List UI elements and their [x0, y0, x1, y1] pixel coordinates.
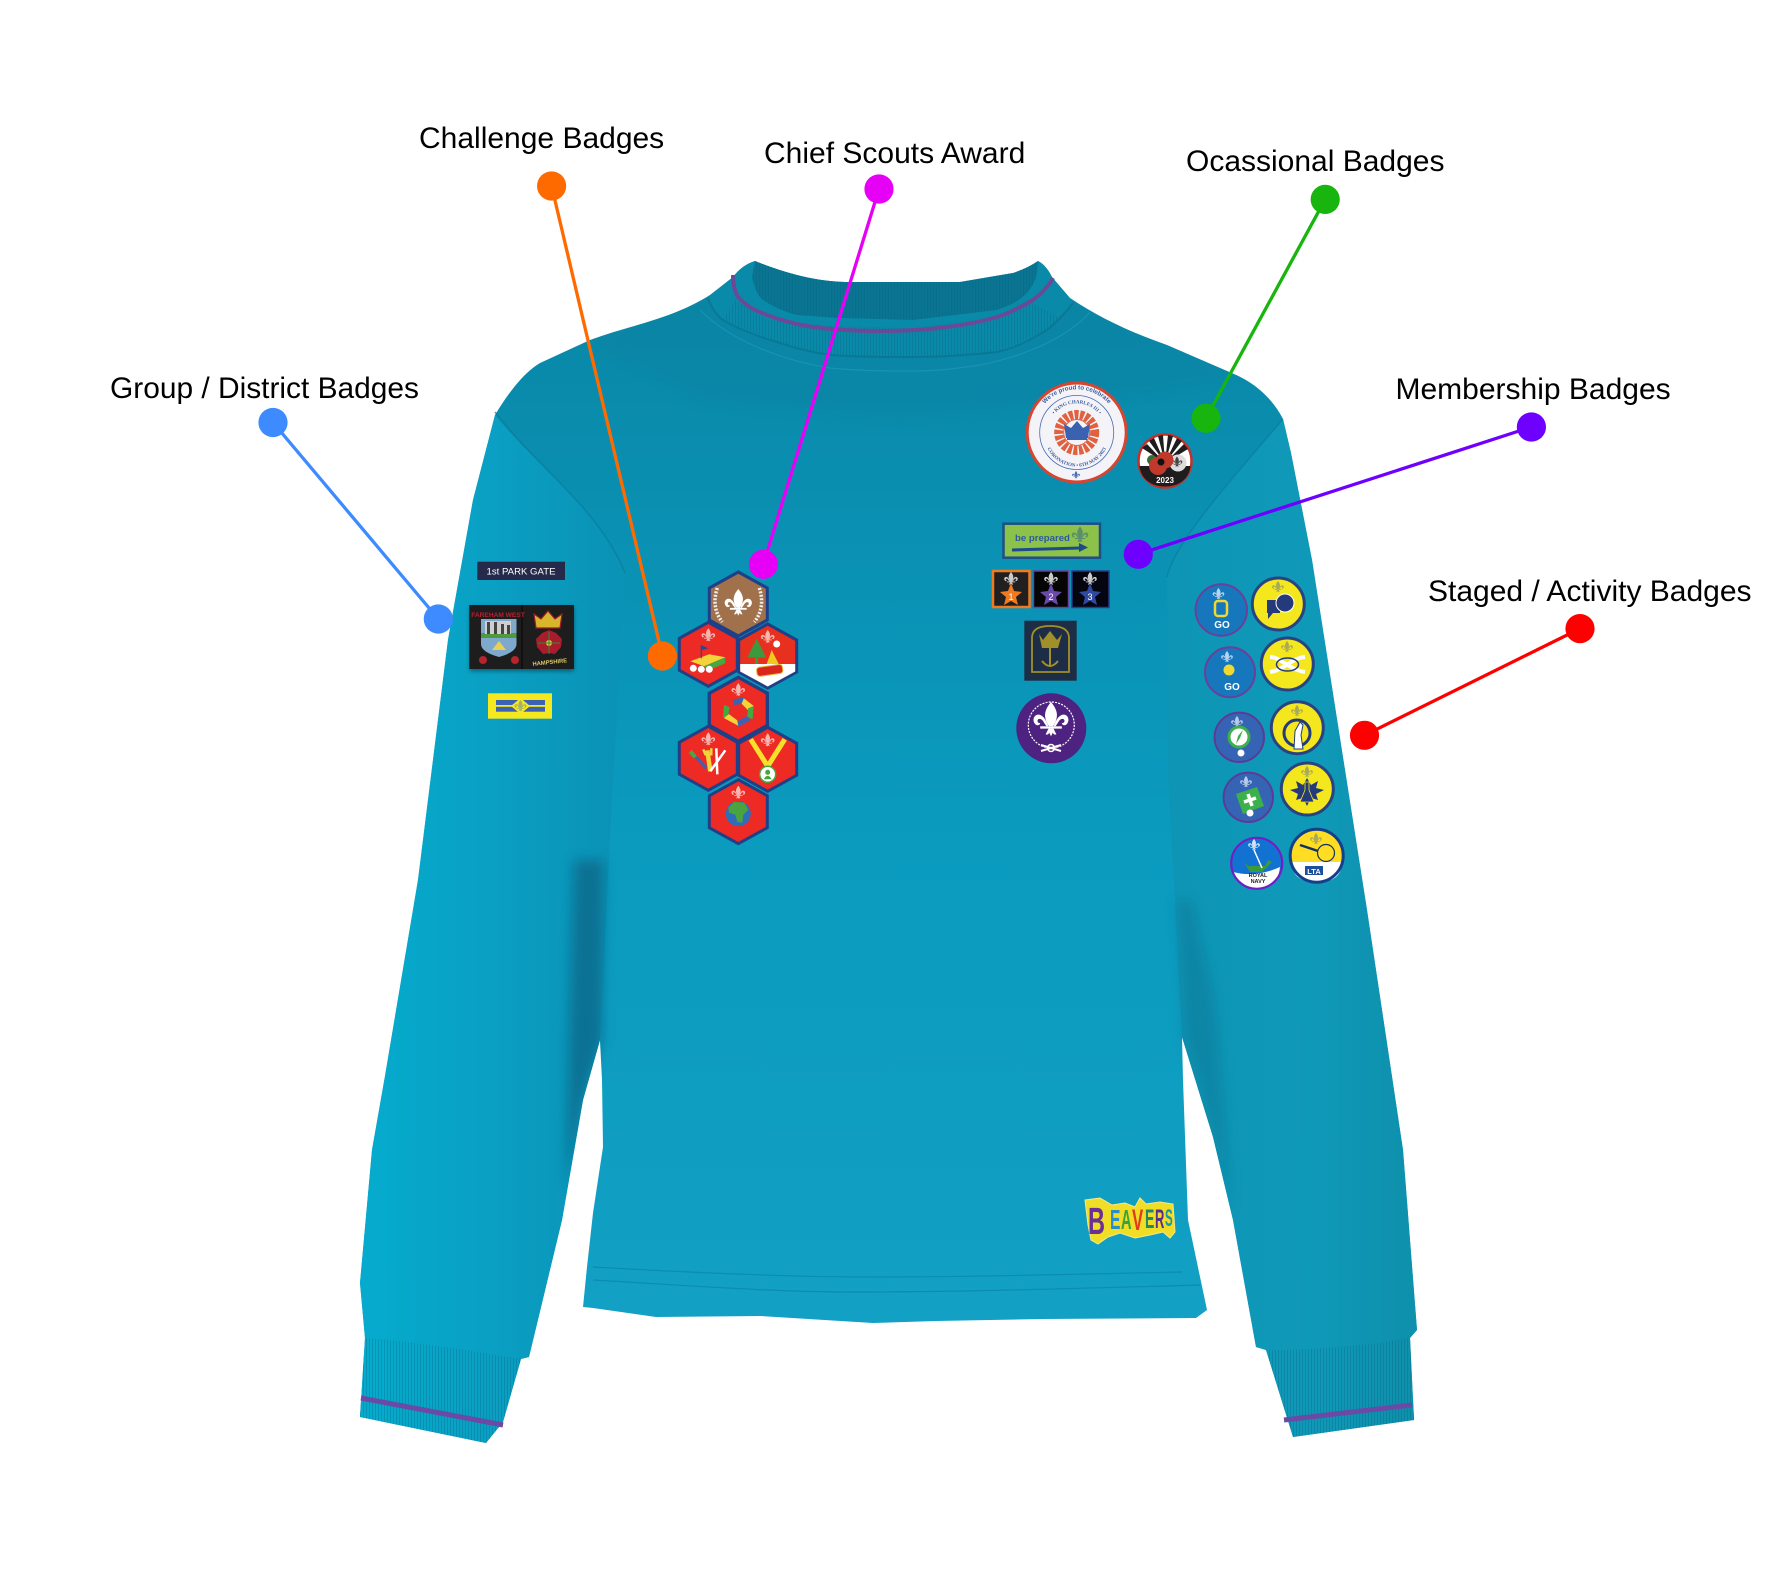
beavers logo: A: [1121, 1204, 1132, 1235]
progress star badge 2: 2: [1048, 592, 1054, 602]
collar ribbing: [723, 261, 1060, 357]
right cuff stripe: [1284, 1405, 1412, 1420]
skills challenge hexagon: [679, 726, 737, 790]
collar rib: [708, 261, 1073, 357]
collar shoulder shade: [614, 298, 1206, 362]
label: Membership Badges: Membership Badges: [1396, 373, 1671, 406]
staged and activity badges: [1196, 578, 1343, 889]
collar purple stripe: [733, 275, 1053, 331]
staged badge: navigator: [1215, 713, 1264, 762]
beavers logo: V: [1132, 1204, 1144, 1237]
pointer: challenge badges: [537, 171, 677, 671]
district and county badge: HAMPSHIRE: [532, 658, 568, 668]
pointer: membership badges: [1124, 412, 1546, 569]
adventure challenge hexagon: [739, 624, 797, 688]
chief scout award hexagon: [709, 572, 767, 636]
label: Ocassional Badges: Ocassional Badges: [1186, 145, 1444, 178]
world membership badge: [1016, 693, 1086, 763]
progress star badge 3: 3: [1087, 592, 1093, 602]
world challenge hexagon: [709, 780, 767, 844]
group and district badges: [469, 562, 574, 719]
be prepared badge: be prepared: [1015, 533, 1070, 544]
progress star badge 1: 1: [1008, 592, 1014, 602]
coronation badge: [1026, 382, 1128, 484]
activity badge: tennis LTA: [1290, 829, 1343, 882]
progress star badge 1: [993, 571, 1030, 607]
sleeve seams: [495, 412, 625, 573]
teamwork challenge hexagon: [709, 677, 767, 741]
name tape: 1st PARK GATE: [487, 566, 555, 578]
occasional badges: [1026, 382, 1193, 489]
membership badges: [993, 524, 1109, 763]
activity badge: knots: [1261, 638, 1313, 690]
outdoors challenge hexagon: [679, 622, 737, 686]
be prepared badge: [1004, 524, 1100, 558]
left cuff stripe: [361, 1398, 503, 1425]
district and county badge: FAREHAM WEST: [471, 612, 525, 619]
pointer: occasional badges: [1191, 185, 1340, 433]
right sleeve: [1167, 419, 1417, 1437]
staged badge: go outdoors 2: GO: [1224, 682, 1240, 693]
beavers logo: [1085, 1198, 1175, 1244]
label: Challenge Badges: Challenge Badges: [419, 122, 664, 155]
beavers logo: E: [1145, 1204, 1154, 1234]
remembrance poppy badge: 2023: [1156, 476, 1174, 485]
hem stitching: [593, 1267, 1200, 1292]
staged badge: first aid: [1224, 773, 1273, 822]
left cuff: [360, 1338, 521, 1443]
label: Staged / Activity Badges: Staged / Activity Badges: [1428, 575, 1752, 608]
pointer: group and district badges: [258, 408, 453, 634]
beavers logo: B: [1088, 1199, 1105, 1242]
progress star badge 3: [1072, 571, 1109, 608]
progress star badge 2: [1034, 571, 1068, 608]
beavers logo: R: [1155, 1205, 1164, 1234]
personal challenge hexagon: [739, 727, 797, 791]
activity badge: international: [1252, 578, 1304, 630]
infographic: badge placement on sweatshirt: [112, 126, 1750, 1443]
activity badge: sports: [1271, 702, 1323, 754]
label: Chief Scouts Award: Chief Scouts Award: [764, 137, 1025, 170]
staged badge: go outdoors 1: [1196, 584, 1247, 636]
right cuff: [1266, 1338, 1414, 1437]
district and county badge: [469, 605, 574, 671]
staged badge: go outdoors 1: GO: [1214, 620, 1230, 631]
staged badge: go outdoors 2: [1205, 647, 1255, 697]
beavers logo: E: [1110, 1203, 1120, 1235]
left sleeve: [360, 415, 625, 1443]
staged badge: royal navy: ROYAL: [1249, 873, 1268, 879]
fabric shadows: [566, 295, 1234, 1215]
challenge and chief scout hexagon badges: [679, 572, 797, 844]
label: Group / District Badges: Group / District Badges: [110, 372, 419, 405]
pointer: chief scouts award: [749, 174, 894, 579]
staged badge: royal navy: NAVY: [1251, 879, 1266, 885]
staged badge: royal navy: [1231, 838, 1282, 889]
sweatshirt: [360, 261, 1417, 1443]
coronation badge: We're proud to celebrate: [1042, 384, 1110, 404]
name tape: [477, 562, 565, 580]
left armpit shadow: [566, 860, 604, 1190]
beavers logo: S: [1165, 1204, 1173, 1231]
activity badge: tennis LTA: LTA: [1307, 867, 1321, 876]
coronation badge: • KING CHARLES III •: [1052, 400, 1101, 414]
right armpit shadow: [1176, 902, 1226, 1166]
collar back: [752, 261, 1038, 320]
county flash badge: [488, 693, 552, 719]
coronation badge: CORONATION • 6TH MAY 2023: [1048, 448, 1106, 467]
sea scouts style badge: [1024, 621, 1077, 681]
remembrance poppy badge: [1138, 434, 1192, 488]
activity badge: scientist: [1281, 763, 1333, 815]
pointer: staged and activity badges: [1350, 614, 1595, 750]
